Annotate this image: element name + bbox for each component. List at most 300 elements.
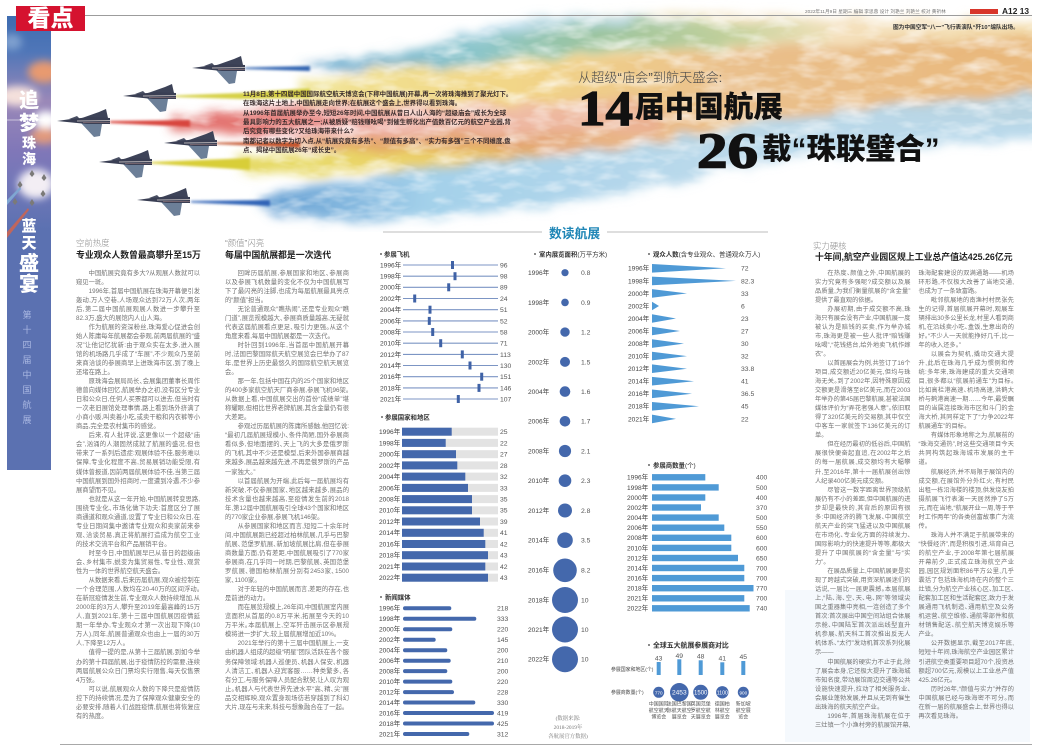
- chart: visitors triangles: 2018年: [628, 402, 650, 411]
- chart: top five global air shows comparison: 41: [719, 656, 726, 662]
- air show names: 天展览会: [691, 714, 711, 720]
- article 2: kicker: “颜值”闪亮: [225, 238, 264, 248]
- chart: indoor exhibition area bubbles: 1.5: [581, 359, 591, 366]
- trail roots near the jets: [110, 66, 310, 206]
- article 1: heading: 专业观众人数曾最高攀升至15万: [76, 250, 201, 260]
- jet 3: [57, 109, 110, 137]
- chart: news media rounded bars: 2018年: [379, 719, 401, 728]
- chart: top five global air shows comparison: 770: [655, 690, 663, 695]
- chart: exhibiting countries and regions bars: 2000年: [379, 450, 401, 459]
- air show names: 英国范堡: [691, 700, 711, 708]
- chart: exhibiting countries and regions bars: 41: [500, 530, 508, 537]
- chart: top five global air shows comparison: 参展商数量(个): [611, 689, 644, 696]
- article 2: body: 以首届航展为开端,此后每一届航展均有新突破,不仅参展国家、地区越来越多,展品的技术含量也越来越高,至疫情发生前的2018年,第12届中国航展吸引全球43个国家和地区的770家企业参展,参展飞机146架。: [225, 478, 349, 521]
- article 2: body: 无论普通观众“瞧热闹”,还是专业观众“瞧门道”,展览规模越大、参展商质量越高,无疑就代表这届航展看点更足、吸引力更强。从这个角度来看,每届中国航展都是一次迭代。: [225, 306, 349, 340]
- banner title: 追梦珠海 蓝天盛宴: 盛: [19, 251, 39, 275]
- chart: exhibiting countries and regions bars: 1996年: [379, 427, 401, 436]
- air show names: 展览会: [715, 714, 730, 720]
- chart: exhibiting countries and regions bars: 32: [500, 474, 508, 481]
- chart: indoor exhibition area bubbles: 1996年: [528, 268, 550, 277]
- chart: visitors triangles: [628, 249, 760, 423]
- chart: exhibitors bars: 2012年: [627, 553, 649, 562]
- left banner strip: [7, 16, 51, 470]
- chart: exhibited aircraft dot-on-line: 2002年: [380, 294, 402, 303]
- article 2: body: 2021年举行的第十三届中国航展上,一支由机器人组成的超级“明星”团队活跃在各个服务保障领域:机器人巡便员、机器人保安、机器人清洁工、机器人迎宾客服……种类繁多、各有分工,与服务保障人员配合默契,让人叹为观止。机器人与代表世界先进水平“高、精、尖”展品交相辉映,观众置身现场彷若穿越到了科幻大片,现在与未来,科技与想象融合在了一起。: [225, 640, 349, 711]
- chart: indoor exhibition area bubbles: 2.3: [581, 478, 591, 485]
- chart: visitors triangles: 2006年: [628, 326, 650, 335]
- chart: indoor exhibition area bubbles: 10: [581, 657, 589, 664]
- article 1: body: 1996年,首届中国航展在珠海开幕便引发轰动,万人空巷,人场观众达到72万人次,两年后,第二届中国航展观展人数进一步攀升至82.3万,盛大的展馆内人山人海。: [76, 288, 200, 322]
- article 2: body: 参观过历届航展的陈庸所感触,他回忆说:“最初几届航展规模小、条件简陋,国外参展商看似多,但地面摆的、天上飞的大多是俄罗斯的飞机,其中不少还是模型,后来外国参展商越来越多,展品越来越先进,不再是俄罗斯的产品一家独大。”: [225, 423, 349, 476]
- header rule: [85, 15, 1032, 16]
- chart: visitors triangles: 2016年: [628, 389, 650, 398]
- chart: news media rounded bars: 425: [497, 721, 509, 728]
- chart: news media rounded bars: [379, 592, 509, 738]
- banner background clouds and mini jets: [7, 30, 51, 238]
- page meta line: 2022年11月9日 星期三 编辑 李思蓉 设计 刘艳兰 刘艳兰 校对 黄祈林: [805, 9, 946, 14]
- chart: exhibitors bars: 740: [756, 606, 768, 613]
- chart: news media rounded bars: 228: [497, 690, 509, 696]
- main title line 1: 届中国航展: [635, 91, 783, 124]
- banner title: 追梦珠海 蓝天盛宴: [19, 88, 39, 425]
- article 1: body: 时至今日,中国航展早已从昔日的超级庙会、乡村集市,蜕变为集贸易性、专业性、观赏性为一体的世界航空航天盛会。: [76, 550, 200, 575]
- chart: indoor exhibition area bubbles: 2.1: [581, 448, 591, 455]
- banner title: 追梦珠海 蓝天盛宴: 追: [19, 88, 39, 112]
- chart: exhibited aircraft dot-on-line: 98: [500, 274, 508, 281]
- chart: news media rounded bars: 2014年: [379, 698, 401, 707]
- chart: indoor exhibition area bubbles: 10: [581, 597, 589, 604]
- article 3: body: 毗邻航展地的南渔村村民张先生的记得,首届航展开幕时,观展车辆排出30多公里长龙,村里人看到商机,在沿线卖小吃、盒饭,生意出奇的好。“不少人一天就能挣好几千,比一年的收入还多。”: [918, 297, 1014, 349]
- chart: news media rounded bars: 1998年: [379, 614, 401, 623]
- chart: exhibited aircraft dot-on-line: 51: [500, 307, 508, 314]
- air show names: 罗航空航: [691, 707, 711, 714]
- chart: exhibited aircraft dot-on-line: 2004年: [380, 305, 402, 314]
- chart: exhibiting countries and regions bars: 25: [500, 429, 508, 436]
- banner title: 追梦珠海 蓝天盛宴: 届: [22, 355, 32, 365]
- article 1: body: 作为航展的资深粉丝,珠海爱心促进会创始人陈庸每年航展都会参观,前两届航展的“盛况”让他记忆犹新:由于观众实在太多,进入展馆的机场路几乎成了“车展”,不少观众乃至前来商洽谈的参展商早上进珠海市区,到了晚上还堵在路上。: [76, 324, 200, 376]
- chart: top five global air shows comparison: 1100: [717, 690, 728, 696]
- chart: exhibited aircraft dot-on-line: 107: [500, 396, 512, 403]
- chart: top five global air shows comparison: 全球五大航展参展商对比: [653, 640, 729, 649]
- chart: exhibited aircraft dot-on-line: 2000年: [380, 283, 402, 292]
- banner title: 追梦珠海 蓝天盛宴: 展: [22, 415, 32, 425]
- chart: exhibiting countries and regions bars: 1998年: [379, 438, 401, 447]
- air show names: 法国巴黎国: [667, 700, 692, 708]
- chart: indoor exhibition area bubbles: 2018年: [528, 595, 550, 604]
- chart: exhibiting countries and regions bars: 参展国家和地区: [385, 412, 430, 421]
- chart: exhibitors bars: 2006年: [627, 523, 649, 532]
- chart: exhibited aircraft dot-on-line: 2021年: [380, 394, 402, 403]
- chart: exhibiting countries and regions bars: 27: [500, 452, 508, 459]
- chart: exhibiting countries and regions bars: 35: [500, 496, 508, 504]
- chart: visitors triangles: 27: [741, 328, 749, 335]
- chart: exhibitors bars: 400: [756, 495, 768, 502]
- chart: news media rounded bars: 1996年: [379, 604, 401, 613]
- article 1: body: 可以说,航展观众人数的下降只是疫情防控下的持续情况,是为了保障观众健康安全的必要安排,随着人们战胜疫情,航展也将恢复应有的热度。: [76, 686, 200, 720]
- chart: exhibited aircraft dot-on-line: 113: [500, 352, 511, 359]
- article 3: body: 在热度、颜值之外,中国航展的实力究竟有多强呢?成交额以及展品质量,为我们衡量航展的“含金量”提供了最直观的依据。: [815, 270, 910, 304]
- article 3: body: 但在经历最初的低谷后,中国航展很快便奋起直追,在2002年之后的每一届航展,成交额均有大幅攀升,至2016年,第十一届航展创出惊人纪录400亿美元成交额。: [815, 441, 910, 485]
- chart: news media rounded bars: 2008年: [379, 666, 401, 676]
- chart: exhibiting countries and regions bars: 2012年: [379, 517, 401, 526]
- chart: exhibitors bars: 700: [756, 576, 768, 582]
- chart: exhibitors bars: [627, 460, 768, 613]
- jet 4: [164, 131, 217, 159]
- chart: exhibitors bars: 1998年: [627, 483, 649, 492]
- chart: visitors triangles: 1996年: [628, 264, 650, 273]
- main title line 1: [578, 80, 783, 136]
- lead paragraph: 在珠海这片土地上,中国航展走向世界;在航展这个盛会上,世界得以看到珠海。: [243, 100, 461, 107]
- chart: exhibited aircraft dot-on-line: [380, 249, 512, 403]
- chart: exhibiting countries and regions bars: 43: [500, 575, 508, 582]
- chart: top five global air shows comparison: 43: [655, 656, 663, 662]
- data source note: [548, 714, 588, 740]
- chart: indoor exhibition area bubbles: 2022年: [528, 655, 550, 664]
- hero image: aerobatic jets with coloured smoke trails: [57, 6, 1032, 230]
- chart: visitors triangles: 36.5: [741, 391, 754, 398]
- section tag 看点: [16, 6, 85, 31]
- chart: exhibiting countries and regions bars: 2022年: [379, 573, 401, 582]
- section tag 看点: 看点: [28, 5, 74, 31]
- chart: indoor exhibition area bubbles: 2000年: [528, 328, 550, 336]
- jet 5: [99, 150, 152, 178]
- main title line 1: 14: [578, 80, 633, 136]
- air show names: 展览会: [672, 714, 687, 720]
- chart: indoor exhibition area bubbles: 2004年: [528, 387, 550, 396]
- article 1: body: 从数据来看,后来历届航展,观众被控制在一个合理范围,人数均在20-40万的区间浮动。在新冠疫情发生前,专业观众人数持续增加,从2000年的3万人,攀升至2019年最高峰的15万人,直到2021年,第十三届中国航展因疫情延期一年举办,专业观众才第一次出现下降(10万人),同年,航展普通观众也由上一届的30万人,下降至12万人。: [76, 577, 200, 647]
- chart: news media rounded bars: 2021年: [379, 729, 401, 738]
- chart: news media rounded bars: 2012年: [379, 688, 401, 696]
- chart: news media rounded bars: 312: [497, 731, 509, 738]
- banner title: 追梦珠海 蓝天盛宴: 国: [22, 385, 32, 395]
- chart: news media rounded bars: 新闻媒体: [385, 592, 411, 601]
- chart: exhibitors bars: 2018年: [627, 584, 649, 593]
- chart: top five global air shows comparison: 49: [676, 653, 683, 660]
- chart: exhibited aircraft dot-on-line: 2012年: [380, 350, 402, 359]
- chart: news media rounded bars: 218: [497, 606, 509, 613]
- chart: exhibiting countries and regions bars: 22: [500, 440, 508, 447]
- chart: news media rounded bars: 220: [497, 627, 509, 634]
- article 1: body: 值得一提的是,从第十三届航展,到如今举办的第十四届航展,出于疫情防控的需要,连续两届航展公众日门票均实行限售,每天仅售票4万张。: [76, 649, 200, 684]
- chart: news media rounded bars: 2000年: [379, 625, 401, 634]
- article 1: body: 中国航展究竟有多大?从观展人数就可以窥见一斑。: [76, 270, 200, 286]
- chart: news media rounded bars: 2006年: [379, 656, 401, 665]
- chart: visitors triangles: 2000年: [628, 289, 650, 298]
- chart: exhibiting countries and regions bars: 43: [500, 553, 508, 560]
- chart: exhibiting countries and regions bars: 2014年: [379, 528, 401, 537]
- chart: exhibiting countries and regions bars: 39: [500, 519, 508, 526]
- article 3: body: 历时26年,“颜值与实力”并存的中国航展已经与珠海密不可分。而在新一届的航展盛会上,世界也得以再次看见珠海。: [918, 686, 1014, 720]
- banner title: 追梦珠海 蓝天盛宴: 梦: [19, 112, 39, 135]
- chart: exhibiting countries and regions bars: 2010年: [379, 506, 401, 515]
- chart: exhibited aircraft dot-on-line: 2010年: [380, 339, 402, 348]
- chart: top five global air shows comparison: 45: [740, 654, 747, 661]
- lead paragraph: 点、揭秘中国航展26年“成长史”。: [243, 147, 340, 154]
- chart: exhibitors bars: 650: [756, 555, 768, 562]
- chart: exhibiting countries and regions bars: 35: [500, 508, 508, 515]
- smoke trails: [170, 12, 1038, 222]
- article 1: kicker: 空前热度: [76, 238, 110, 248]
- chart: exhibiting countries and regions bars: 2008年: [379, 494, 401, 504]
- chart: exhibiting countries and regions bars: 2016年: [379, 539, 401, 548]
- chart: visitors triangles: 观众人数(含专业观众、普通观众: [653, 249, 745, 258]
- chart: exhibited aircraft dot-on-line: 151: [500, 374, 512, 381]
- article 2: body: 从参展国家和地区而言,短短二十余年时间,中国航展跑已经超过柏林航展,几乎与巴黎航展、范堡罗航展、新加坡航展比肩,但在参展商数量方面,仍有差距,中国航展吸引了770家参展商,在几乎同一时期,巴黎航展、英国范堡罗航展、德国柏林航展分别有2453家、1500家、1100家。: [225, 523, 349, 584]
- chart: visitors triangles: 23: [741, 316, 749, 323]
- article 1: body: 也就是从这一年开始,中国航展转变思路,围绕专业化、市场化做下功夫:首度区分了展商通道和观众通道,设置了专业日和公众日,在专业日期间集中邀请专业观众和卖家前来参观、洽谈贸易,真正将航展打造成为航空工业的技术交流平台和产品展销平台。: [76, 496, 200, 548]
- bottom rule: [60, 744, 1032, 745]
- data section heading 数读航展: 数读航展: [549, 226, 600, 241]
- chart: indoor exhibition area bubbles: 2002年: [528, 357, 550, 366]
- air show names: 航空展: [736, 707, 751, 714]
- chart: visitors triangles: 30: [741, 341, 749, 348]
- chart: visitors triangles: 22: [741, 416, 749, 423]
- chart: visitors triangles: 2008年: [628, 339, 650, 348]
- chart: exhibitors bars: 参展商数量(个): [653, 460, 696, 469]
- article 2: body: 而在展览规模上,26年间,中国航展室内展览面积从首届的0.8万平米,拓展至今天的10万平米。本届航展上,空军歼击展示区参展规模将进一步扩大,较上届航展增加近10%。: [225, 604, 349, 638]
- main title line 2: 26: [697, 122, 758, 178]
- chart: news media rounded bars: 333: [497, 616, 509, 623]
- chart: exhibited aircraft dot-on-line: 89: [500, 285, 508, 292]
- chart: indoor exhibition area bubbles: 1998年: [528, 298, 550, 307]
- lead paragraph: [243, 90, 512, 154]
- chart: exhibitors bars: 2021年: [627, 594, 649, 603]
- country-count columns: [657, 659, 745, 675]
- chart: exhibited aircraft dot-on-line: 96: [500, 262, 508, 269]
- article 3: heading: 十年间,航空产业园区规上工业总产值达425.26亿元: [815, 252, 1013, 262]
- chart: exhibitors bars: 2008年: [627, 533, 649, 542]
- main title kicker: 从超级“庙会”到航天盛会:: [578, 70, 722, 85]
- chart: news media rounded bars: 2016年: [379, 708, 401, 717]
- article 3: body: 以首届展会为例,共签订了16个项目,成交额近20亿美元,但均与珠海无关。到了2002年,因特殊原因成交额更是滑落至8亿美元,而在2003年举办的第45届巴黎航展,甚被法国媒体评价为“弄花者强人意”。依旧取得了320亿美元的交易额,其中仅空中客车一家就签下136亿美元的订单。: [815, 360, 910, 439]
- chart: exhibiting countries and regions bars: [379, 412, 508, 582]
- chart: indoor exhibition area bubbles: 2014年: [528, 536, 550, 545]
- jet 6: [137, 188, 190, 216]
- chart: top five global air shows comparison: [611, 640, 751, 720]
- chart: exhibited aircraft dot-on-line: 参展飞机: [384, 249, 410, 258]
- chart: visitors triangles: 33: [741, 291, 749, 298]
- chart: exhibited aircraft dot-on-line: 2018年: [380, 383, 402, 392]
- main title line 2: [697, 122, 940, 178]
- data source note: 各航展官方数据): [548, 732, 588, 740]
- article 3: body: 以展会为契机,撬动交通大提升,此后在珠海几乎成为惯例和传统:多年来,珠海建成的重大交通项目,很多都以“航展前通车”为目标。比如高栏港高速、机场高速,洪鹤大桥与鹤港高速一期……今年,最受瞩目的当属连接珠海市区和斗门的金海大桥,其同样定下了“力争2022年航展通车”的目标。: [918, 351, 1014, 430]
- red paper tag: [970, 9, 998, 14]
- chart: exhibiting countries and regions bars: 33: [500, 485, 508, 492]
- chart: news media rounded bars: 210: [497, 658, 509, 665]
- chart: visitors triangles: 72: [741, 266, 749, 273]
- chart: exhibitors bars: 2016年: [627, 574, 649, 582]
- chart: exhibitors bars: 1996年: [627, 473, 649, 482]
- banner title: 追梦珠海 蓝天盛宴: 珠: [22, 135, 37, 151]
- banner title: 追梦珠海 蓝天盛宴: 四: [22, 340, 32, 350]
- article 2: body: [225, 270, 349, 711]
- chart: news media rounded bars: 200: [497, 648, 509, 655]
- article 2: body: 时针回到1996年,当首届中国航展开幕时,法国巴黎国际航天航空展览会已举办了87年,是世界上历史最悠久的国际航空航天展览会。: [225, 342, 349, 376]
- exhibitor-count bubbles: [653, 683, 749, 702]
- chart: indoor exhibition area bubbles: 3.5: [581, 538, 591, 545]
- chart: visitors triangles: 2004年: [628, 314, 650, 323]
- photo caption: 图为中国空军“八一”飞行表演队“歼10”编队出场。: [893, 25, 1019, 31]
- article 2: body: 那一年,包括中国在内的25个国家和地区的400多家航空航天厂商参展,参展飞机96架。从数据上看,中国航展交出的首份“成绩单”堪称耀眼,但相比世界老牌航展,其含金量仍有很大差距。: [225, 378, 349, 421]
- chart: visitors triangles: 33.8: [741, 366, 754, 373]
- chart: indoor exhibition area bubbles: 2016年: [528, 566, 550, 575]
- banner title: 追梦珠海 蓝天盛宴: 宴: [19, 272, 39, 296]
- air show names: 览会: [738, 714, 748, 720]
- chart: exhibitors bars: 700: [756, 565, 768, 572]
- chart: exhibiting countries and regions bars: 42: [500, 541, 508, 548]
- chart: visitors triangles: 6: [741, 303, 745, 310]
- air show names: 新加坡: [736, 700, 751, 708]
- chart: indoor exhibition area bubbles: 2008年: [528, 446, 550, 455]
- chart: visitors triangles: 2002年: [628, 301, 650, 310]
- chart: exhibiting countries and regions bars: 2004年: [379, 472, 401, 481]
- chart: exhibitors bars: 700: [756, 596, 768, 603]
- article 3: body: 珠海人并不满足于航展带来的“快餐经济”,而是积极引进,培育自己的航空产业,于2008年第七届航展开幕前夕,正式成立珠海航空产业园,园区规划面积86平方公里,几乎囊括了包括珠海机场在内的整个三灶镇,分为航空产业核心区、加工区、配套加工区和生活配套区,致力于发展通用飞机制造、通用航空及公务机运营、航空维修、通航零部件和航材销售配送、航空航天博览娱乐等产业。: [918, 532, 1014, 638]
- article 2: body: 回眸历届航展,参展国家和地区、参展商以及参展飞机数量的变化不仅为中国航展写下了最闪亮的注脚,也成为每届航展最具亮点的“颜值”担当。: [225, 270, 349, 304]
- article 3: body: 1996年,首届珠海航展在位于三灶镇一个小渔村旁的航展馆开幕,珠海配套建设的双满通路——机场环形路,不仅极大改善了当地交通,也成为了一条致富路。: [815, 270, 1014, 729]
- banner title: 追梦珠海 蓝天盛宴: 十: [22, 324, 32, 335]
- chart: indoor exhibition area bubbles: 0.8: [581, 270, 591, 277]
- article 3: body: 中国航展的硬实力不止于此,除了展会本身,它还极大提升了珠海城市知名度,带动展馆周边交通等公共设施快速提升,拉动了相关服务业、会展业蓬勃发展,并且从无到有催生出珠海的航天航空产业。: [815, 659, 910, 711]
- chart: exhibited aircraft dot-on-line: 2016年: [380, 372, 402, 381]
- chart: visitors triangles: 32: [741, 354, 749, 360]
- chart: exhibitors bars: 600: [756, 535, 768, 542]
- air show names: 德国柏: [715, 700, 730, 708]
- chart: exhibiting countries and regions bars: 2021年: [379, 562, 401, 571]
- article 1: body: [76, 270, 200, 720]
- chart: visitors triangles: 41: [741, 379, 749, 386]
- chart: indoor exhibition area bubbles: 0.9: [581, 300, 591, 307]
- article 3: body: 办展初期,由于成交额不高,珠海只有展会没有产业,中国航展一度被认为是赔钱的买卖,作为举办城市,珠海更是被一些人批评“赔钱赚吆喝”,“花钱搭台,给外地卖飞机作嫁衣”。: [815, 306, 910, 358]
- chart: news media rounded bars: 200: [497, 668, 509, 676]
- chart: indoor exhibition area bubbles: 10: [581, 627, 589, 634]
- chart: exhibited aircraft dot-on-line: 2008年: [380, 327, 402, 336]
- chart: exhibiting countries and regions bars: 2006年: [379, 483, 401, 492]
- article 3: body: 航展经济,并不局限于展馆内的成交额,在展馆外分外红火,有村民出租一栋沿海楼的楼顶,供发烧友拍摄航展飞行表演一天居然挣了5万元,而在当地,“航展开业一周,等于平时工作两年”的各类创富故事广为流传。: [918, 469, 1014, 530]
- chart: exhibitors bars: 400: [756, 475, 768, 482]
- chart: visitors triangles: 2021年: [628, 414, 650, 423]
- chart: indoor exhibition area bubbles: 2010年: [528, 476, 550, 485]
- article 3: body: 有媒体形象地称之为,航展前的“珠海交通热”,时这些交通项目今天共同构筑起珠海城市发展的主干道。: [918, 432, 1014, 466]
- chart: exhibitors bars: 2004年: [627, 513, 649, 522]
- air show names: 博览会: [651, 714, 666, 720]
- chart: exhibitors bars: 2000年: [627, 493, 649, 502]
- chart: news media rounded bars: 145: [497, 637, 509, 644]
- chart: news media rounded bars: 330: [497, 700, 509, 707]
- pale wash behind right article: [785, 590, 1030, 742]
- chart: news media rounded bars: 220: [497, 679, 509, 686]
- article 3: kicker: 实力硬核: [813, 241, 846, 251]
- chart: exhibited aircraft dot-on-line: 52: [500, 318, 508, 325]
- chart: indoor exhibition area bubbles: 2006年: [528, 417, 550, 426]
- banner title: 追梦珠海 蓝天盛宴: 天: [21, 235, 37, 252]
- lead paragraph: 11月8日,第十四届中国国际航空航天博览会(下称中国航展)开幕,再一次将珠海推到了聚光灯下。: [243, 91, 512, 98]
- data source note: 2018-2019年: [554, 723, 583, 731]
- chart: exhibitors bars: 500: [756, 485, 768, 492]
- chart: exhibiting countries and regions bars: 28: [500, 463, 508, 470]
- lead paragraph: 后究竟有哪些变化?又给珠海带来什么?: [243, 128, 354, 135]
- chart: visitors triangles: 2012年: [628, 364, 650, 373]
- chart: exhibited aircraft dot-on-line: 1996年: [380, 260, 402, 269]
- chart: exhibited aircraft dot-on-line: 2006年: [380, 316, 402, 325]
- chart: exhibiting countries and regions bars: 2018年: [379, 551, 401, 560]
- chart: visitors triangles: 万人): [745, 250, 760, 258]
- lead paragraph: 从1996年首届航展举办至今,短短26年时间,中国航展从昔日人山人海的“超级庙会”成长为全球: [243, 110, 506, 117]
- chart: visitors triangles: 2010年: [628, 352, 650, 360]
- chart: top five global air shows comparison: 900: [739, 690, 748, 695]
- article 3: body: 尽管这一数字距离世界顶级航展仍有不小的差距,但中国航展的进步却是最快的,其背后的原因有很多:中国经济的腾飞发展、中国航空航天产业的突飞猛进以及中国航展在市场化、专业化方面的持续发力、国际影响力的快速提升等等,都极大提升了中国航展的“含金量”与“实力”。: [815, 487, 910, 566]
- air show names: 际航天航空: [667, 707, 692, 714]
- chart: exhibitors bars: 600: [756, 545, 768, 552]
- data source note: (数据来源:: [556, 714, 581, 722]
- air show names: 航空航天: [649, 707, 669, 714]
- article 1: body: 原珠海会展局局长、会展集团董事长周作德曾向媒体回忆,航展举办之初,没有区分专业日和公众日,任何人买票都可以进去,但当时有一次老旧展馆处理事情,路上看到场外挤满了小商小贩,叫卖着小吃,或卖干粮和内衣裤等小商品,完全是农村集市的感觉。: [76, 378, 200, 430]
- chart: indoor exhibition area bubbles: 2021年: [528, 625, 550, 634]
- article 2: heading: 每届中国航展都是一次迭代: [225, 250, 331, 260]
- banner title: 追梦珠海 蓝天盛宴: 海: [22, 151, 36, 167]
- lead paragraph: 最具影响力的五大航展之一;从被质疑“赔钱赚吆喝”到催生孵化出产值数百亿元的航空产业园,背: [243, 119, 511, 126]
- chart: indoor exhibition area bubbles: 2.8: [581, 508, 591, 515]
- chart: exhibitors bars: 370: [756, 505, 768, 512]
- chart: indoor exhibition area bubbles: 1.7: [581, 419, 591, 426]
- air show names: 林航空: [715, 707, 730, 714]
- chart: indoor exhibition area bubbles: 8.2: [581, 568, 591, 575]
- chart: exhibitors bars: 2002年: [627, 503, 649, 512]
- chart: exhibited aircraft dot-on-line: 2014年: [380, 361, 402, 370]
- chart: top five global air shows comparison: 1500: [694, 690, 708, 696]
- chart: exhibited aircraft dot-on-line: 71: [500, 341, 508, 348]
- chart: exhibitors bars: 2014年: [627, 563, 649, 572]
- chart: exhibited aircraft dot-on-line: 58: [500, 329, 508, 336]
- chart: exhibiting countries and regions bars: 42: [500, 564, 508, 571]
- chart: exhibitors bars: 550: [756, 525, 768, 532]
- chart: indoor exhibition area bubbles: 1.6: [581, 389, 591, 396]
- chart: top five global air shows comparison: 2453: [672, 690, 687, 696]
- chart: news media rounded bars: 2004年: [379, 646, 401, 655]
- chart: top five global air shows comparison: 参展国家和地区(个): [611, 666, 654, 673]
- jet 2: [123, 84, 176, 112]
- air show names: [649, 700, 751, 720]
- banner title: 追梦珠海 蓝天盛宴: 航: [22, 399, 32, 410]
- chart: exhibited aircraft dot-on-line: 1998年: [380, 272, 402, 281]
- page number: A12 13: [1002, 6, 1029, 16]
- chart: visitors triangles: 2014年: [628, 377, 650, 386]
- chart: visitors triangles: 45: [741, 404, 749, 411]
- chart: news media rounded bars: 2002年: [379, 635, 401, 644]
- chart: exhibited aircraft dot-on-line: 24: [500, 296, 508, 303]
- air show names: 中国国际: [649, 700, 669, 708]
- chart: exhibiting countries and regions bars: 2002年: [379, 461, 401, 470]
- main title line 2: 载“珠联璧合”: [762, 133, 940, 166]
- jet 1: [192, 56, 245, 84]
- banner title: 追梦珠海 蓝天盛宴: 中: [22, 369, 32, 380]
- chart: exhibitors bars: 770: [756, 586, 768, 593]
- chart: indoor exhibition area bubbles: 1.2: [581, 330, 591, 336]
- chart: exhibited aircraft dot-on-line: 146: [500, 385, 512, 392]
- chart: exhibitors bars: 2010年: [627, 543, 649, 552]
- chart: visitors triangles: 1998年: [628, 276, 650, 285]
- article 3: body: 公开数据显示,截至2017年底,短短十年间,珠海航空产业园区累计引进航空类重要项目超70个,投资总额超700亿元,规模以上工业总产值425.26亿元。: [918, 640, 1014, 684]
- chart: exhibited aircraft dot-on-line: 130: [500, 363, 512, 370]
- chart: top five global air shows comparison: 48: [697, 654, 705, 660]
- banner title: 追梦珠海 蓝天盛宴: 第: [22, 309, 32, 320]
- lead paragraph: 南都记者以数字为切入点,从“航展究竟有多热”、“颜值有多高”、“实力有多强”三个不同维度,盘: [243, 138, 511, 145]
- chart: news media rounded bars: 2010年: [379, 677, 401, 686]
- chart: exhibitors bars: 500: [756, 515, 768, 522]
- chart: indoor exhibition area bubbles: 2012年: [528, 506, 550, 515]
- chart: indoor exhibition area bubbles: [528, 249, 607, 672]
- chart: exhibitors bars: 2022年: [627, 604, 649, 613]
